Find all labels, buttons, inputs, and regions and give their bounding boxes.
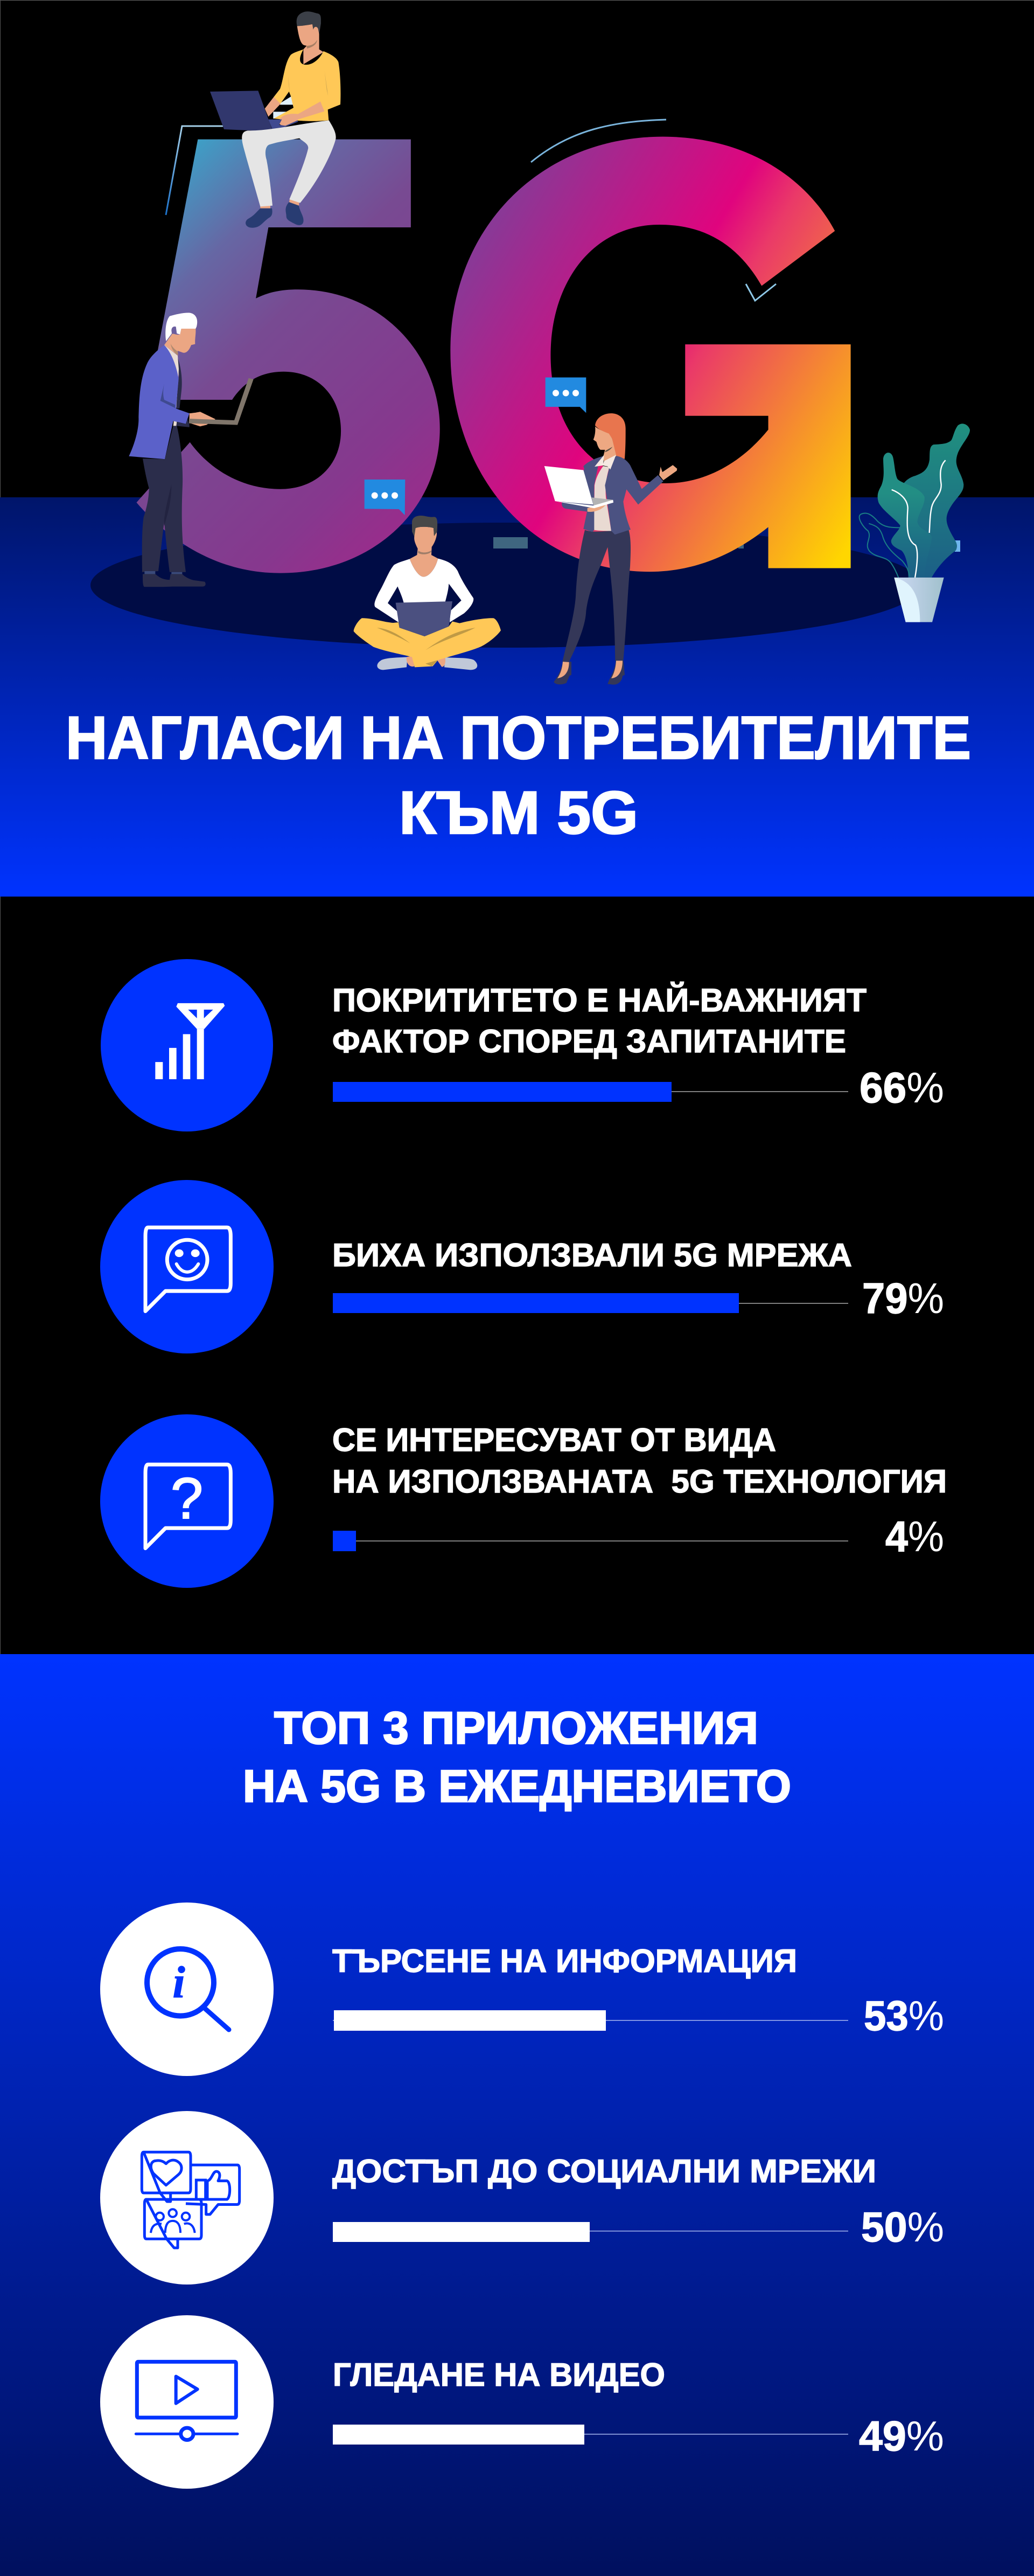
potted plant [860,423,970,622]
label: БИХА ИЗПОЛЗВАЛИ 5G МРЕЖА [332,1237,852,1273]
big 5G lettering [136,137,851,573]
label [332,982,867,1059]
title [66,704,971,846]
value: 50% [861,2203,944,2251]
progress bar [333,1293,848,1313]
section heading: НА 5G В ЕЖЕДНЕВИЕТО [243,1761,791,1811]
icon: social bubbles [100,2111,274,2285]
row: would use 5G 79% [100,1180,944,1353]
small floor tiles [493,537,960,552]
section heading: ТОП 3 ПРИЛОЖЕНИЯ [274,1703,758,1753]
label: ТЪРСЕНЕ НА ИНФОРМАЦИЯ [332,1943,797,1979]
row: interested in technology 4% [100,1414,947,1588]
icon: signal antenna [101,959,273,1131]
label: ФАКТОР СПОРЕД ЗАПИТАНИТЕ [332,1023,846,1059]
progress bar [333,1531,848,1551]
back leaf [903,423,970,578]
decorative lines around 5G [166,120,776,301]
value: 49% [859,2412,944,2460]
panel: hero background [0,0,1034,897]
row: coverage 66% [101,959,944,1131]
icon: question speech bubble [100,1414,274,1588]
section heading [243,1703,791,1811]
person: man sitting cross-legged with laptop [354,480,501,670]
label: НА ИЗПОЛЗВАНАТА 5G ТЕХНОЛОГИЯ [332,1463,947,1499]
icon: magnifier: i [172,1957,185,2008]
icon: magnifier [100,1903,274,2076]
flower pot [894,578,944,622]
person: man sitting on the 5 with laptop [210,11,340,228]
person: older man standing with laptop [129,313,254,587]
panel: top 3 applications [0,1654,1034,2576]
row: social networks 50% [100,2111,944,2285]
icon: video player [100,2315,274,2489]
letter G [450,137,851,572]
speech bubble [546,378,586,413]
label [332,1422,947,1499]
front leaf [878,453,932,578]
person: woman standing with open laptop [544,378,677,685]
row: information search 53% [100,1903,944,2076]
label: ДОСТЪП ДО СОЦИАЛНИ МРЕЖИ [332,2153,876,2189]
letter 5 [136,140,440,573]
label: ПОКРИТИТЕТО Е НАЙ-ВАЖНИЯТ [332,982,867,1018]
progress bar [333,2010,848,2031]
value: 66% [860,1064,944,1112]
panel: consumer attitudes [0,897,1034,1654]
value: 79% [862,1274,944,1322]
icon: question speech bubble: ? [171,1466,203,1531]
progress bar [333,1082,848,1102]
row: video 49% [100,2315,944,2489]
title: КЪМ 5G [399,779,638,846]
speech bubble [365,480,405,515]
leaf veins and tendrils [860,460,946,578]
value: 53% [864,1992,944,2039]
icon: smile speech bubble [100,1180,274,1353]
progress bar [333,2425,848,2445]
ground ellipse [90,523,922,648]
title: НАГЛАСИ НА ПОТРЕБИТЕЛИТЕ [66,704,971,772]
label: ГЛЕДАНЕ НА ВИДЕО [333,2357,665,2393]
label: СЕ ИНТЕРЕСУВАТ ОТ ВИДА [332,1422,776,1458]
progress bar [333,2222,848,2242]
value: 4% [885,1512,944,1560]
